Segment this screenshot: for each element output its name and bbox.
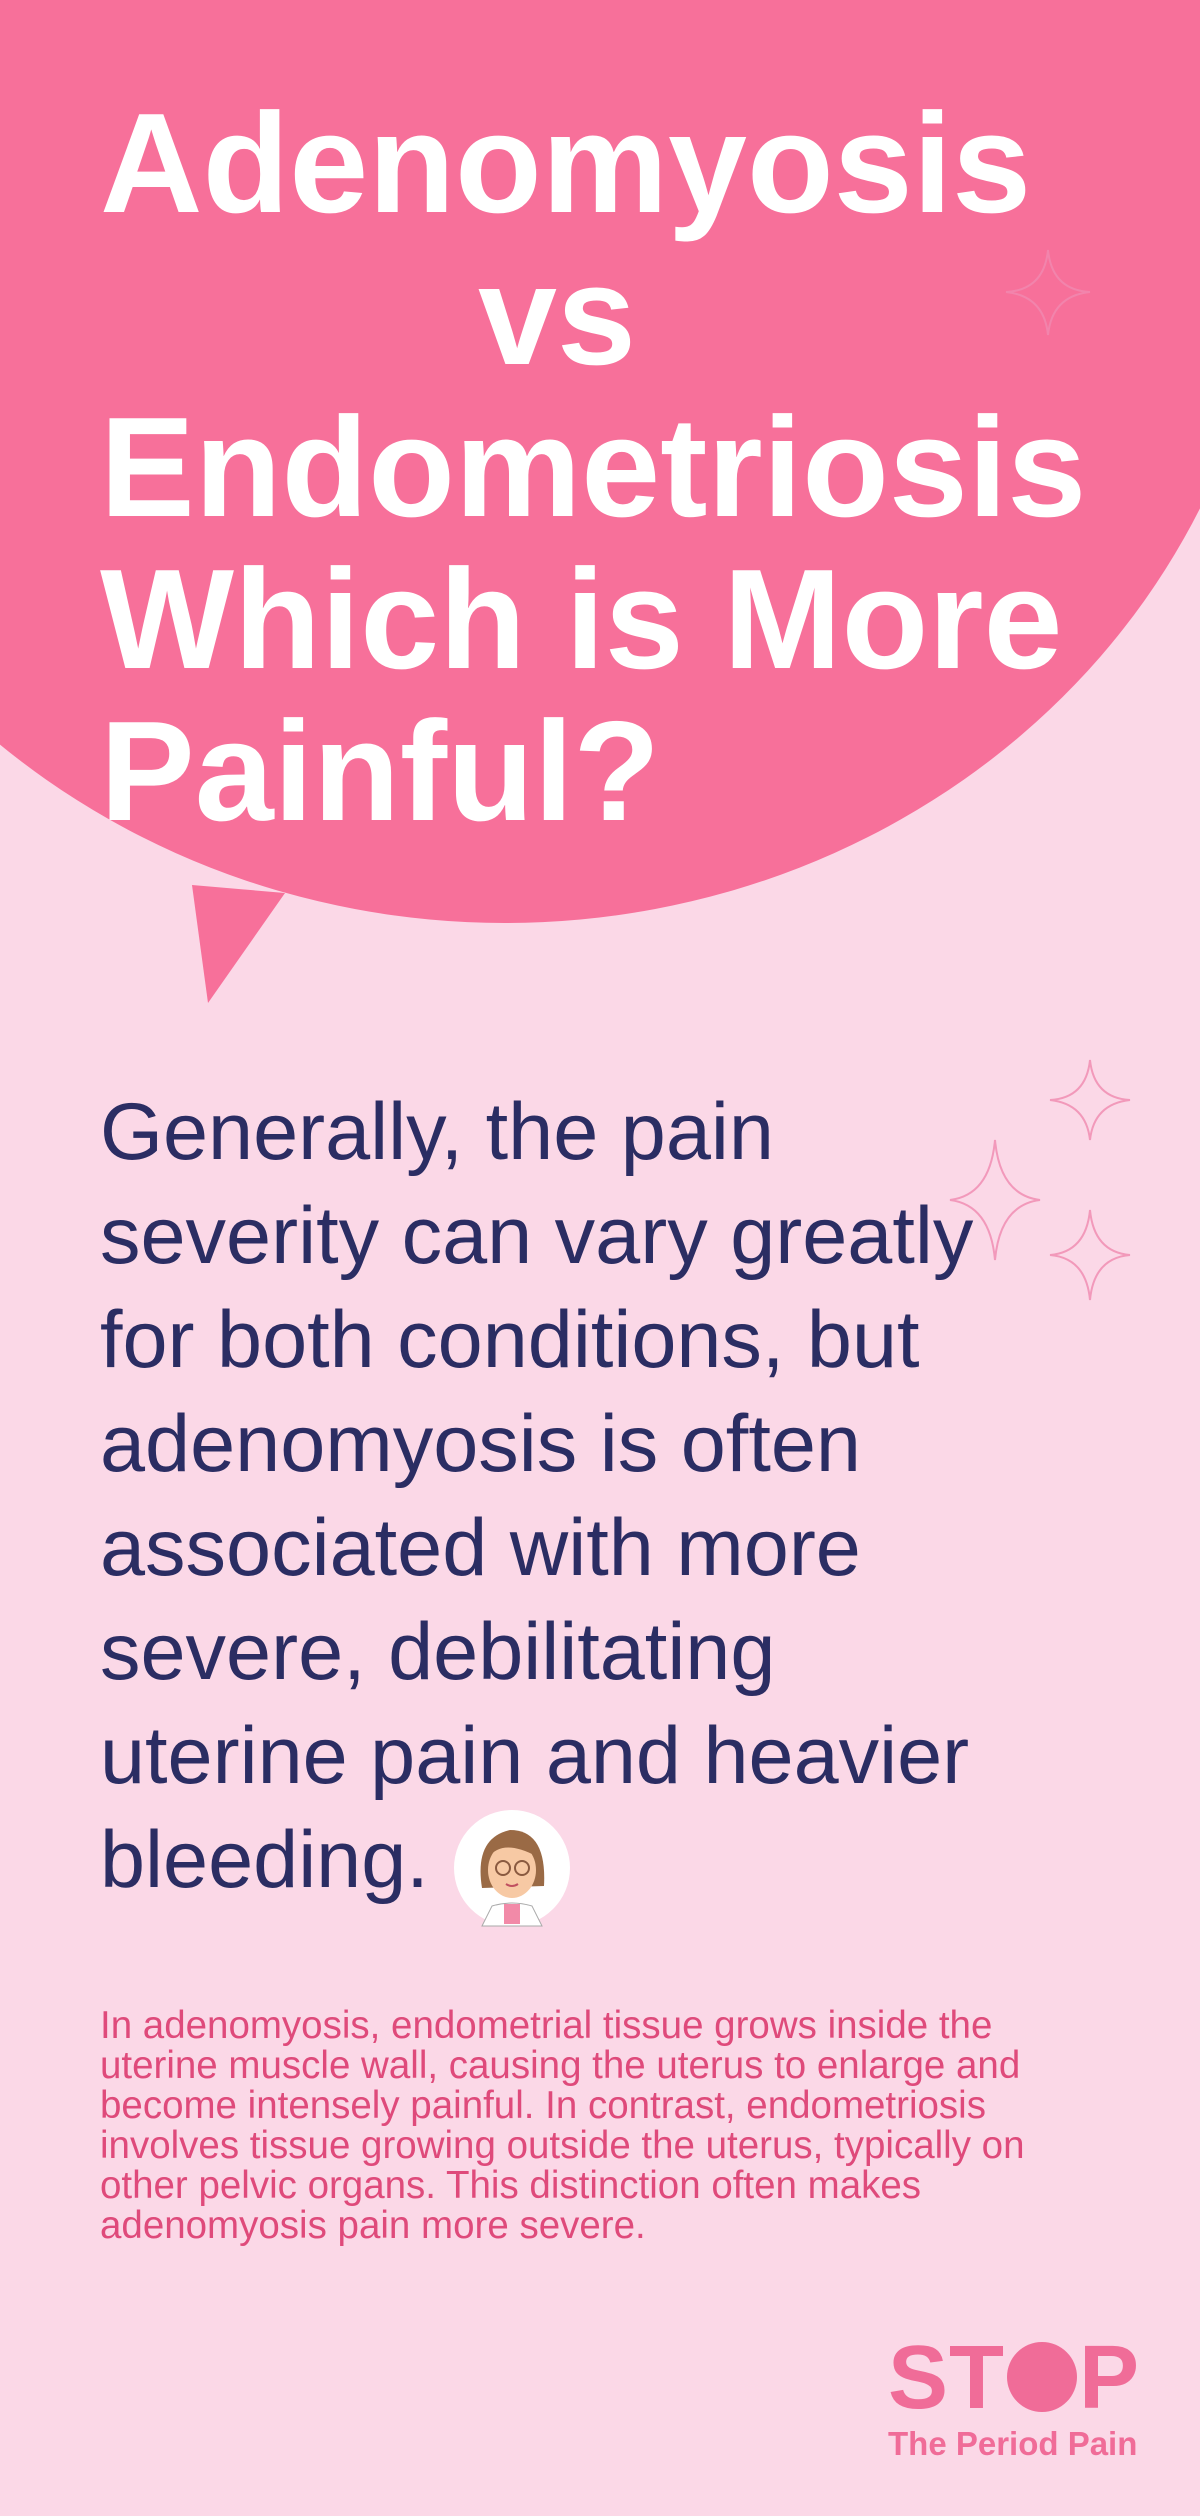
main text: bleeding. [100, 1815, 429, 1905]
icon: doctor avatar [454, 1810, 570, 1926]
title: Endometriosis [100, 388, 1086, 547]
main text: severity can vary greatly [100, 1191, 973, 1281]
title [100, 84, 1086, 851]
main text: for both conditions, but [100, 1295, 920, 1385]
explanatory text: uterine muscle wall, causing the uterus to enlarge and [100, 2044, 1020, 2087]
explanatory text: involves tissue growing outside the uterus, typically on [100, 2124, 1024, 2167]
sparkle decorations [950, 250, 1130, 1300]
explanatory text: become intensely painful. In contrast, endometriosis [100, 2084, 986, 2127]
main text [100, 1087, 974, 1905]
explanatory text: In adenomyosis, endometrial tissue grows inside the [100, 2004, 992, 2047]
explanatory text: adenomyosis pain more severe. [100, 2204, 646, 2247]
speech bubble [0, 0, 1200, 1003]
main text: Generally, the pain [100, 1087, 774, 1177]
main text: adenomyosis is often [100, 1399, 861, 1489]
title: Painful? [100, 692, 660, 851]
main text: associated with more [100, 1503, 861, 1593]
title: vs [478, 236, 636, 395]
explanatory text: other pelvic organs. This distinction often makes [100, 2164, 921, 2207]
title: Which is More [100, 540, 1063, 699]
logo: ST P [888, 2328, 1140, 2428]
title: Adenomyosis [100, 84, 1031, 243]
logo: The Period Pain [888, 2425, 1137, 2462]
main text: uterine pain and heavier [100, 1711, 969, 1801]
explanatory text [100, 2004, 1024, 2247]
main text: severe, debilitating [100, 1607, 775, 1697]
